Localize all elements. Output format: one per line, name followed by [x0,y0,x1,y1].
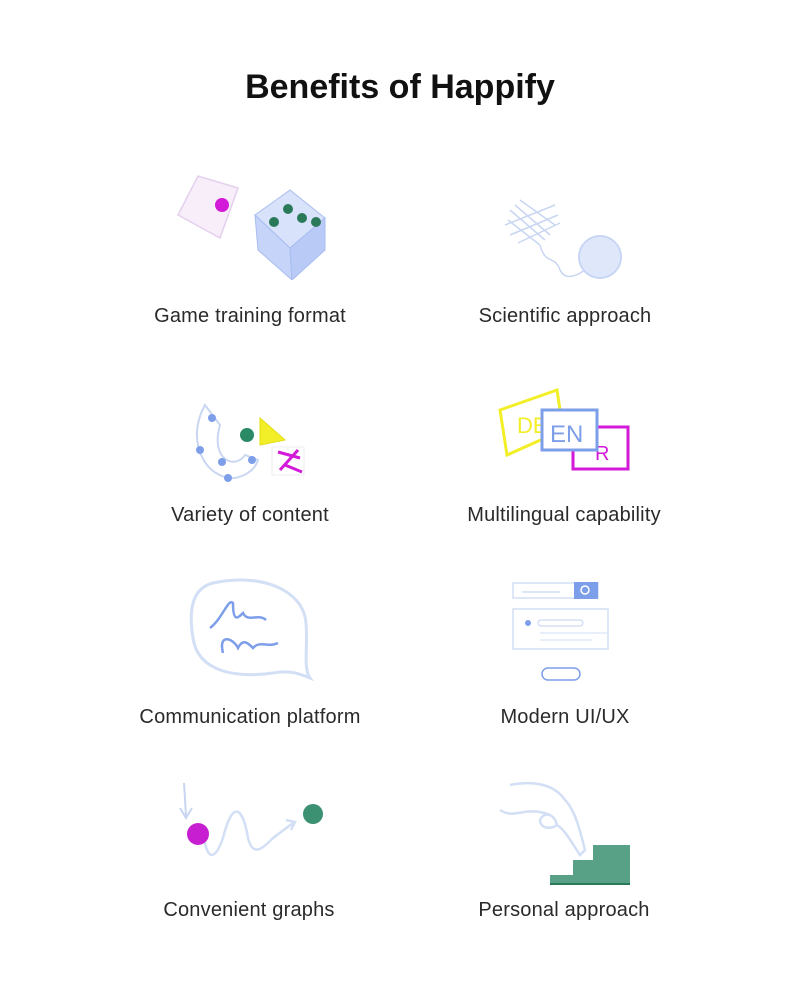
label: modern ui/ux: Modern UI/UX [500,706,630,728]
icon: graph [179,783,323,856]
icon: languages: DE [517,413,548,438]
label: game training format: Game training format [154,305,346,327]
label: convenient graphs: Convenient graphs [163,899,335,921]
label: personal approach: Personal approach [478,899,650,921]
title: Benefits of Happify [245,68,555,106]
icon: speech bubble [190,578,314,682]
icon: hand and steps [500,782,630,885]
label: variety of content: Variety of content [171,504,329,526]
icon: yarn [504,200,622,279]
icon: dice [177,175,326,280]
icon: variety of content [196,403,304,482]
label: communication platform: Communication platform [139,706,361,728]
icon: languages: R [595,443,609,465]
label: multilingual capability: Multilingual capability [467,504,661,526]
icon: ui mockup [512,582,609,681]
icon: languages: EN [550,421,583,448]
icon: languages [498,388,630,470]
label: scientific approach: Scientific approach [479,305,651,327]
